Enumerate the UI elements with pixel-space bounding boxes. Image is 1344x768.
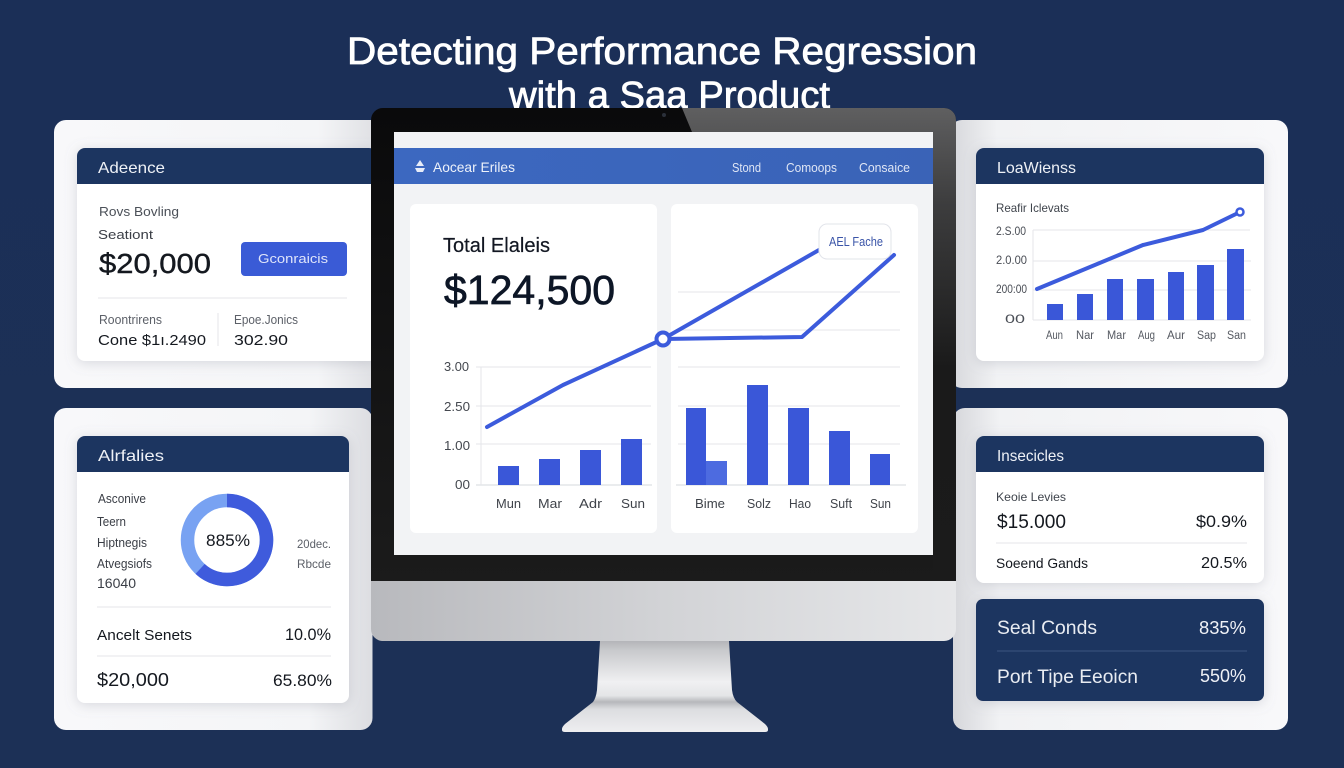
insecticles rows: Soeend Gands [996, 555, 1088, 571]
nav bar: Aocear Eriles [433, 159, 515, 175]
insecticles rows: Keoie Levies [996, 490, 1066, 504]
right bar chart: Hao [789, 496, 811, 511]
left bar chart: 00 [455, 477, 470, 492]
screen [394, 132, 933, 555]
allies legend [97, 492, 152, 591]
title: Detecting Performance Regression [347, 31, 977, 73]
title [347, 31, 977, 117]
left bar chart: 2.50 [444, 399, 470, 414]
right bar chart: Solz [747, 496, 771, 511]
nav bar [394, 148, 933, 184]
navy summary card: 835% [1199, 618, 1246, 638]
allies rows: 65.80% [273, 671, 332, 690]
line chart across cards [487, 250, 894, 427]
nav bar: Consaice [859, 161, 910, 175]
right bar chart: Sun [870, 496, 891, 511]
donut chart: 885% [206, 531, 250, 550]
allies legend: Asconive [98, 492, 146, 506]
title: with a Saa Product [508, 75, 830, 117]
panel: load views [950, 120, 1288, 388]
button: Gconraicis [258, 251, 329, 266]
load views card [976, 148, 1264, 361]
allies rows [97, 625, 332, 690]
insecticles rows: $0.9% [1196, 512, 1247, 531]
callout [819, 224, 891, 259]
navy summary card: Port Tipe Eeoicn [997, 667, 1138, 688]
load views chart [996, 201, 1251, 342]
load views heading: LoaWienss [997, 160, 1076, 177]
load views chart: Aur [1167, 330, 1185, 342]
allies legend: Atvegsiofs [97, 557, 152, 571]
navy summary card [976, 599, 1264, 701]
left bar chart: 3.00 [444, 359, 469, 374]
audience stats: Epoe.Jonics [234, 313, 298, 327]
bezel glare [682, 108, 956, 581]
camera [662, 113, 666, 117]
load views chart: San [1227, 330, 1246, 342]
right bar chart: Suft [830, 496, 852, 511]
right bar chart [676, 292, 906, 511]
donut side labels: Rbcde [297, 557, 331, 571]
marker [656, 332, 670, 346]
allies rows: 10.0% [285, 625, 331, 644]
left bar chart: Mun [496, 496, 521, 511]
allies rows: Ancelt Senets [97, 627, 192, 644]
donut side labels: 20dec. [297, 537, 331, 551]
audience card [77, 148, 377, 361]
left bar chart: Adr [579, 496, 603, 511]
nav bar: Comoops [786, 161, 837, 175]
insecticles rows: 20.5% [1201, 555, 1247, 572]
panel: insecticles [953, 408, 1288, 730]
load views chart: 00 [1005, 312, 1025, 326]
load views chart: Aug [1138, 330, 1155, 342]
total value: $124,500 [444, 267, 615, 313]
monitor stand [562, 641, 768, 732]
right bar chart: Bime [695, 496, 725, 511]
audience figures [98, 204, 211, 279]
callout: AEL Fache [829, 235, 883, 249]
insecticles rows [996, 490, 1247, 572]
insecticles rows: $15.000 [997, 512, 1066, 533]
load views chart: Mar [1107, 330, 1126, 342]
left bar chart: Mar [538, 496, 563, 511]
navy summary card: 550% [1200, 666, 1246, 686]
allies legend: Hiptnegis [97, 536, 147, 550]
icon: logo [415, 160, 425, 172]
audience stats: Roontrirens [99, 313, 162, 327]
monitor bezel [371, 108, 956, 581]
load views chart: Sap [1197, 330, 1216, 342]
allies legend: Teern [97, 515, 126, 529]
nav bar: Stond [732, 161, 761, 175]
load views chart: 2.S.00 [996, 224, 1026, 238]
panel: audience [54, 120, 384, 388]
monitor chin [371, 580, 956, 641]
left dashboard card [410, 204, 657, 533]
right dashboard card [671, 204, 918, 533]
donut side labels [297, 537, 331, 571]
left bar chart [444, 359, 652, 511]
left bar chart: Sun [621, 496, 645, 511]
audience stats: 302.90 [234, 332, 288, 349]
load views chart: 200:00 [996, 282, 1027, 296]
audience figures: Rovs Bovling [99, 204, 179, 219]
load views chart: Reafir Iclevats [996, 201, 1069, 215]
load views chart: Nar [1076, 330, 1094, 342]
load views chart: Aun [1046, 330, 1063, 342]
audience stats: Cone $1ı.2490 [98, 332, 206, 349]
navy summary card: Seal Conds [997, 618, 1097, 639]
monitor [371, 108, 956, 641]
total heading: Total Elaleis [443, 235, 550, 257]
audience heading: Adeence [98, 160, 165, 177]
insecticles heading: Insecicles [997, 448, 1064, 465]
allies rows: $20,000 [97, 670, 169, 690]
donut chart [188, 500, 267, 580]
load views chart: 2.0.00 [996, 253, 1027, 267]
panel: allies [54, 408, 372, 730]
left bar chart: 1.00 [444, 438, 470, 453]
insecticles card [976, 436, 1264, 583]
allies card [77, 436, 349, 703]
audience figures: Seationt [98, 227, 153, 242]
button [241, 242, 347, 276]
allies heading: Alrfalies [98, 448, 164, 465]
audience stats [98, 313, 298, 349]
audience figures: $20,000 [99, 248, 211, 279]
allies legend: 16040 [97, 575, 136, 591]
